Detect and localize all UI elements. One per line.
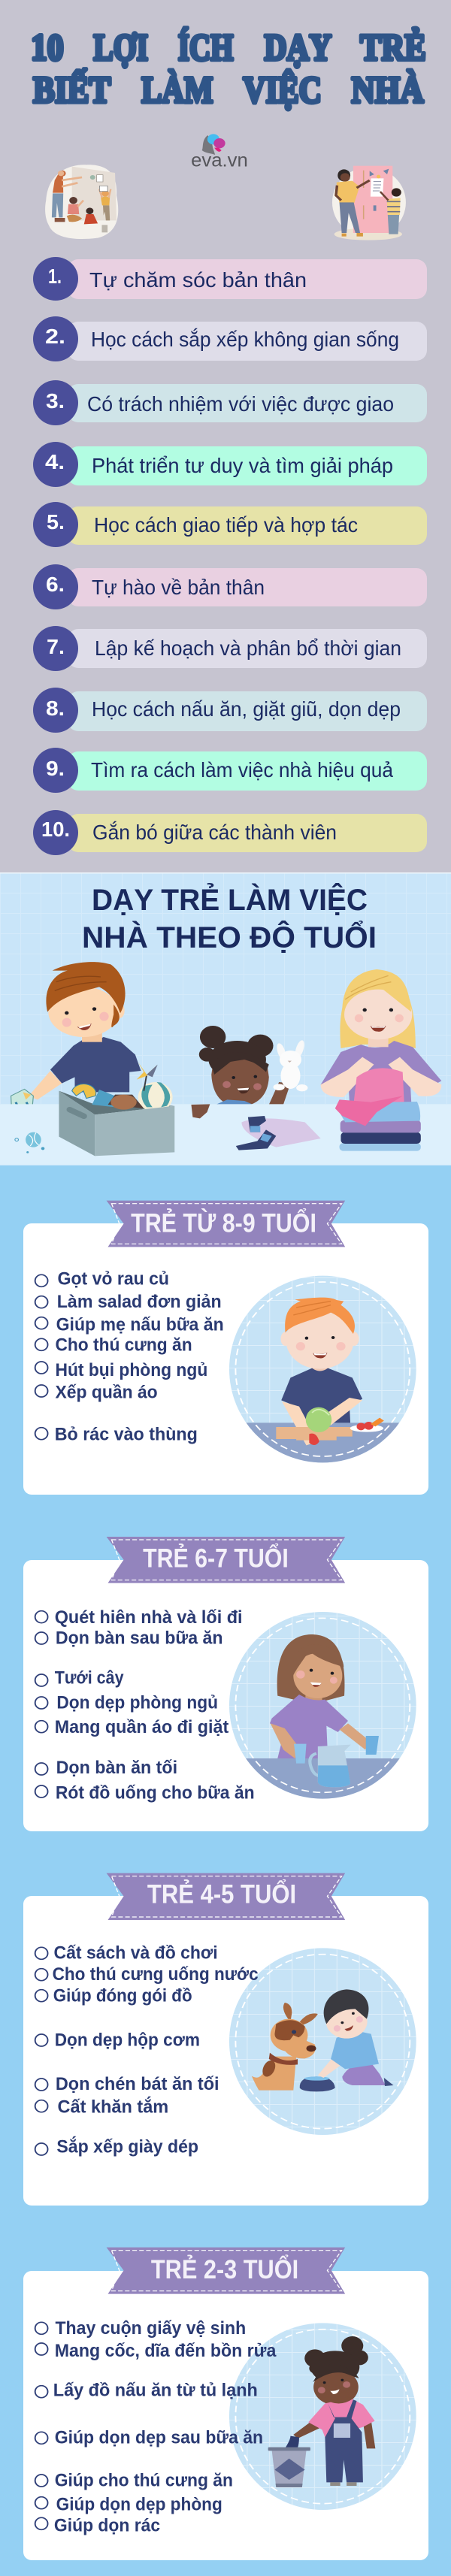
item 9: 9.: [46, 757, 65, 780]
ribbon: age 8-9: [107, 1201, 345, 1247]
panel: chores by age background: [0, 1166, 451, 2576]
item 6: Tự hào về bản thân: [92, 576, 265, 599]
item 2: 2.: [45, 325, 65, 348]
checklist: age 2-3: Giúp dọn rác: [54, 2516, 160, 2535]
item 10: 10.: [41, 818, 70, 841]
item 5: Học cách giao tiếp và hợp tác: [94, 513, 358, 537]
item 9: Tìm ra cách làm việc nhà hiệu quả: [91, 758, 393, 782]
checklist: age 4-5: Giúp đóng gói đồ: [53, 1986, 192, 2006]
heading: teach by age: [82, 882, 377, 954]
title: TRẺ: [360, 26, 426, 68]
illustration: mother and child at fridge: [332, 166, 406, 240]
checklist: age 6-7: Tưới cây: [55, 1668, 124, 1688]
item 8: [33, 688, 427, 733]
item 10: [33, 810, 427, 855]
item 6: 6.: [46, 573, 65, 596]
panel: age 2-3: [23, 2248, 428, 2560]
panel: age 8-9: [23, 1201, 428, 1495]
checklist: age 6-7: [35, 1608, 255, 1803]
illustration: girl pouring water: [227, 1610, 417, 1800]
item 7: Lập kế hoạch và phân bổ thời gian: [95, 636, 401, 660]
illustration: girl using laundry basket: [227, 2322, 417, 2511]
title: LỢI: [93, 26, 148, 68]
checklist: age 8-9: Giúp mẹ nấu bữa ăn: [56, 1315, 224, 1335]
title: NHÀ: [352, 68, 424, 110]
item 5: [33, 502, 427, 547]
ribbon: age 4-5: TRẺ 4-5 TUỔI: [147, 1879, 296, 1909]
checklist: age 4-5: Cho thú cưng uống nước: [53, 1965, 259, 1985]
item 3: [33, 380, 427, 425]
checklist: age 2-3: [35, 2319, 277, 2535]
title: VIỆC: [243, 68, 322, 110]
checklist: age 8-9: Xếp quần áo: [55, 1383, 158, 1402]
checklist: age 6-7: Dọn bàn ăn tối: [56, 1758, 177, 1778]
item 5: 5.: [47, 510, 65, 534]
heading: teach by age: NHÀ THEO ĐỘ TUỔI: [82, 919, 377, 954]
girl with bunny: [199, 1026, 307, 1107]
checklist: age 6-7: Dọn bàn sau bữa ăn: [56, 1628, 223, 1648]
title: LÀM: [141, 68, 213, 110]
checklist: age 8-9: Làm salad đơn giản: [57, 1293, 222, 1312]
ribbon: age 6-7: TRẺ 6-7 TUỔI: [143, 1543, 289, 1573]
illustration: boy preparing vegetables: [227, 1275, 417, 1464]
item 7: [33, 626, 427, 671]
illustration: three children with chores: [0, 962, 451, 1165]
checklist: age 8-9: Cho thú cưng ăn: [55, 1335, 192, 1355]
checklist: age 6-7: Rót đồ uống cho bữa ăn: [56, 1783, 255, 1803]
illustration: boy feeding dog: [227, 1946, 417, 2136]
item 8: 8.: [46, 697, 65, 720]
checklist: age 2-3: Giúp cho thú cưng ăn: [55, 2471, 233, 2490]
title: ÍCH: [178, 26, 233, 68]
checklist: age 4-5: Cất sách và đồ chơi: [54, 1943, 218, 1963]
item 1: 1.: [48, 265, 62, 288]
panel: age 4-5: [23, 1873, 428, 2206]
ribbon: age 8-9: TRẺ TỪ 8-9 TUỔI: [131, 1208, 316, 1238]
checklist: age 2-3: Giúp dọn dẹp phòng: [56, 2495, 222, 2514]
panel: benefits background: [0, 0, 451, 872]
checklist: age 2-3: Thay cuộn giấy vệ sinh: [55, 2319, 246, 2339]
table top: [0, 1104, 451, 1165]
benefit list: [33, 257, 427, 855]
checklist: age 8-9: Hút bụi phòng ngủ: [55, 1361, 207, 1380]
ribbon: age 4-5: [107, 1873, 345, 1920]
checklist: age 8-9: Bỏ rác vào thùng: [55, 1425, 198, 1444]
item 4: [33, 442, 427, 487]
checklist: age 2-3: Giúp dọn dẹp sau bữa ăn: [55, 2428, 263, 2448]
checklist: age 8-9: Gọt vỏ rau củ: [58, 1269, 169, 1289]
title: BIẾT: [33, 68, 110, 110]
checklist: age 2-3: Lấy đồ nấu ăn từ tủ lạnh: [53, 2381, 258, 2400]
checklist: age 4-5: [35, 1943, 259, 2157]
checklist: age 4-5: Dọn chén bát ăn tối: [56, 2075, 219, 2094]
title: DẠY: [265, 26, 331, 68]
item 3: 3.: [46, 389, 65, 413]
toy box: [59, 1062, 174, 1156]
item 6: [33, 564, 427, 609]
checklist: age 6-7: Quét hiên nhà và lối đi: [55, 1608, 243, 1628]
ribbon: age 6-7: [107, 1537, 345, 1583]
item 4: Phát triển tư duy và tìm giải pháp: [92, 454, 393, 477]
checklist: age 8-9: [35, 1269, 224, 1444]
item 9: [33, 748, 427, 793]
ribbon: age 2-3: [107, 2248, 345, 2294]
panel: age guide hero: [0, 872, 451, 1166]
ball and dots: [15, 1132, 44, 1153]
ribbon: age 2-3: TRẺ 2-3 TUỔI: [151, 2254, 298, 2284]
clothes stack: [335, 1096, 421, 1151]
item 8: Học cách nấu ăn, giặt giũ, dọn dẹp: [92, 697, 401, 721]
checklist: age 4-5: Sắp xếp giày dép: [56, 2136, 198, 2157]
item 10: Gắn bó giữa các thành viên: [92, 821, 337, 844]
logo: eva.vn: [191, 134, 248, 171]
item 7: 7.: [47, 635, 65, 658]
logo: eva.vn: eva.vn: [191, 150, 248, 171]
item 2: [33, 316, 427, 361]
checklist: age 6-7: Mang quần áo đi giặt: [55, 1718, 229, 1737]
checklist: age 2-3: Mang cốc, dĩa đến bồn rửa: [55, 2342, 277, 2361]
socks and folded cloth: [236, 1116, 321, 1150]
item 1: Tự chăm sóc bản thân: [89, 268, 307, 292]
checklist: age 4-5: Cất khăn tắm: [58, 2096, 168, 2117]
illustration: family tidying up: [45, 165, 118, 239]
title: [31, 26, 426, 110]
item 3: Có trách nhiệm với việc được giao: [87, 392, 394, 416]
title: 10: [31, 26, 64, 68]
heading: teach by age: DẠY TRẺ LÀM VIỆC: [92, 882, 368, 917]
item 2: Học cách sắp xếp không gian sống: [91, 328, 399, 351]
item 4: 4.: [45, 450, 65, 473]
item 1: [33, 257, 427, 301]
blonde girl folding: [321, 969, 441, 1102]
boy with toy box: [11, 962, 141, 1116]
checklist: age 6-7: Dọn dẹp phòng ngủ: [56, 1693, 218, 1713]
checklist: age 4-5: Dọn dẹp hộp cơm: [55, 2030, 200, 2050]
panel: age 6-7: [23, 1537, 428, 1831]
girl hand on table: [191, 1104, 210, 1118]
